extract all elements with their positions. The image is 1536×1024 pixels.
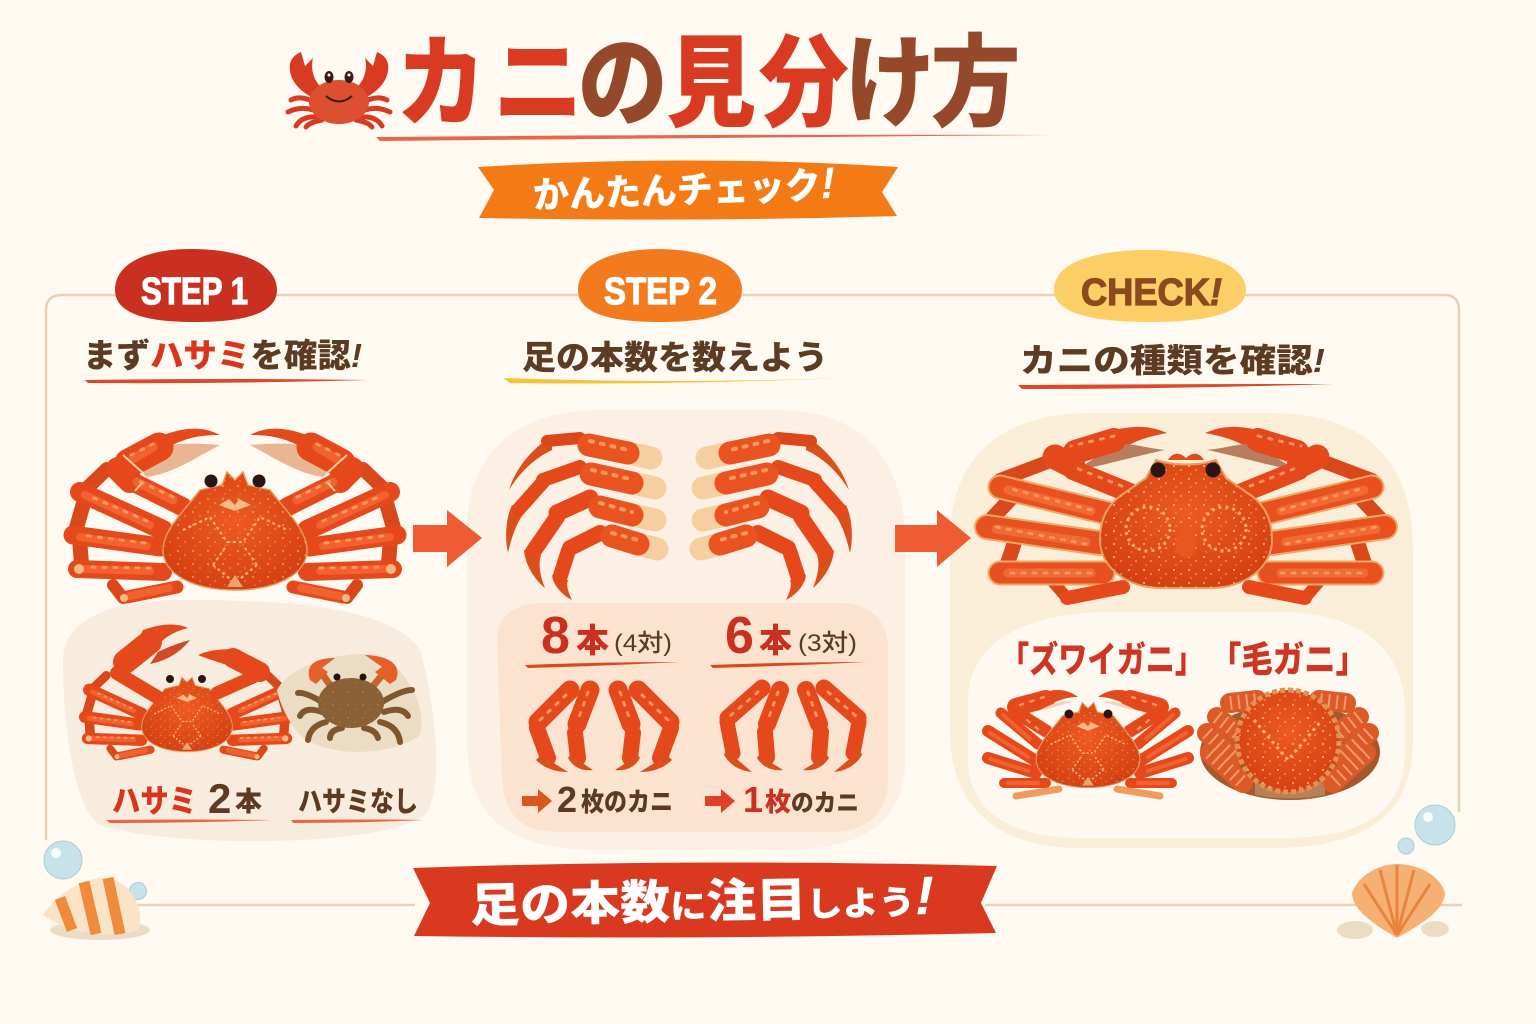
count: 6 legs: 本: [759, 622, 792, 659]
heading: step 2: 足の本数を数えよう: [522, 339, 828, 376]
count: 8 legs: [525, 607, 680, 668]
count: 8 legs: 8: [541, 607, 570, 665]
ribbon: footer: 足の本数 に注目しよう!: [470, 866, 935, 934]
crab: brown no claws: [277, 654, 422, 752]
title: カ: [396, 29, 486, 140]
result: 1 shell: [705, 779, 859, 820]
label: two claws: [106, 775, 272, 823]
panel: column 3 species box: [968, 612, 1405, 838]
icon: bubbles right: [1398, 805, 1455, 854]
panel: column 2: [467, 410, 905, 850]
icon: scallop shell: [1337, 864, 1449, 939]
arrow: step 1 to step 2: [413, 510, 482, 567]
count: 8 legs: (4対): [614, 630, 672, 657]
panel: column 1 lower: [63, 600, 436, 841]
title: け: [845, 29, 935, 140]
count: 6 legs: [710, 607, 866, 668]
title: 見: [666, 29, 756, 140]
badge: step 1: [115, 249, 277, 322]
label: no claws: ハサミなし: [298, 786, 418, 817]
count: 6 legs: (3対): [798, 630, 857, 657]
title: ニ: [493, 29, 583, 140]
count: 6 legs: 6: [725, 607, 754, 665]
badge: check: CHECK!: [1081, 272, 1222, 314]
badge: step 2: [578, 249, 742, 322]
badge: step 1: STEP 1: [141, 271, 248, 313]
label: two claws: 本: [235, 787, 262, 817]
title: 方: [931, 29, 1021, 140]
heading: step 1: まずハサミを確認!: [83, 337, 362, 374]
legs: 8 legs set: [536, 690, 672, 772]
crab: small with claws: [85, 624, 289, 759]
frame outline: [46, 295, 1462, 905]
species label: hairy crab: 「毛ガニ」: [1210, 639, 1367, 680]
crab: large step 1: [73, 429, 397, 602]
crab legs: removed legs left set and right set: [506, 436, 852, 600]
panel: column 3: [950, 413, 1413, 848]
result: 1 shell: 1: [743, 779, 763, 820]
ribbon: footer: [413, 862, 997, 937]
legs: 6 legs set: [724, 688, 862, 772]
ribbon: subtitle: かんたんチェック!: [532, 159, 836, 218]
title underline: [376, 135, 1052, 141]
heading: check: カニの種類を確認 !: [1020, 342, 1325, 379]
result: 1 shell: 枚: [765, 787, 791, 817]
species label: snow crab: 「ズワイガニ」: [1000, 639, 1204, 680]
result: 2 shells: 枚のカニ: [581, 787, 673, 817]
title: の: [578, 29, 668, 140]
result: 1 shell: のカニ: [791, 790, 859, 817]
ribbon: subtitle: [478, 159, 898, 220]
result: 2 shells: 2: [557, 779, 577, 820]
result: 2 shells: [522, 779, 673, 820]
label: two claws: 2: [208, 775, 231, 822]
badge: step 2: STEP 2: [604, 271, 717, 313]
crab: large check: [987, 427, 1385, 598]
panel: column 2 count box: [497, 603, 888, 832]
crab: hairy crab: [1200, 690, 1380, 800]
count: 8 legs: 本: [576, 622, 609, 659]
label: two claws: ハサミ: [112, 783, 197, 819]
title: 分: [759, 29, 849, 140]
title crab icon: [288, 52, 390, 127]
icon: bubbles left: [44, 841, 146, 900]
crab: snow crab small: [988, 690, 1188, 796]
badge: check: [1054, 250, 1246, 322]
arrow: step 2 to check: [895, 510, 971, 567]
icon: spiral shell: [43, 878, 150, 940]
